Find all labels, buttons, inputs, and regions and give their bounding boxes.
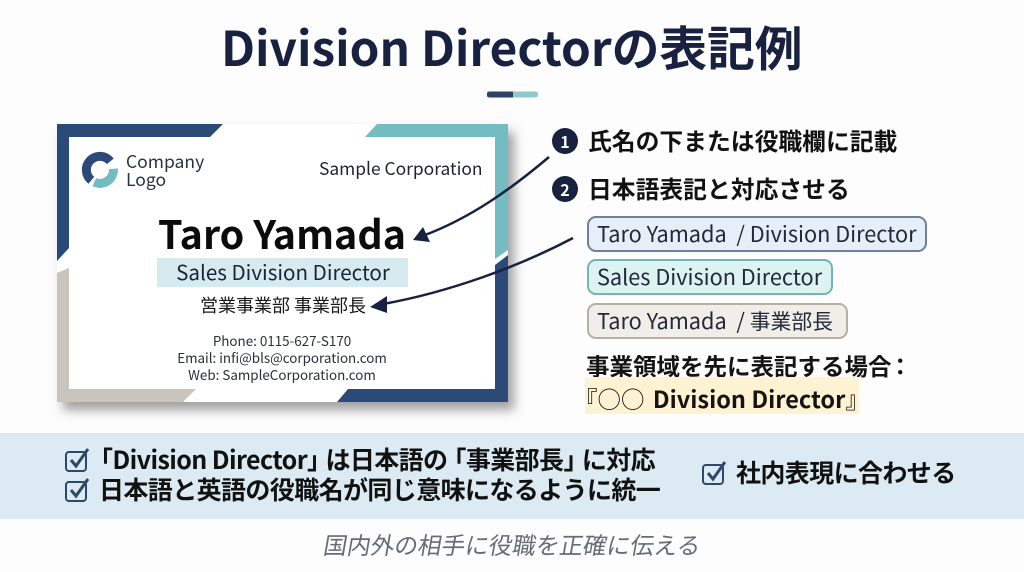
icon: checkbox [65,478,90,502]
badge 2 [552,176,578,202]
step 1 text: 氏名の下または役職欄に記載 [588,122,897,157]
card corner frame [57,124,508,402]
step 1 [552,122,897,157]
person name: Taro Yamada [158,204,406,261]
step 2 text: 日本語表記と対応させる [588,170,850,205]
note heading: 事業領域を先に表記する場合： [586,348,912,382]
item 2 text: 日本語と英語の役職名が同じ意味になるように統一 [99,471,660,507]
job title: Sales Division Director [176,256,390,286]
badge 1: 1 [560,129,570,153]
pill: name and japanese title [587,303,848,339]
check item 3 [702,454,956,490]
footer tagline: 国内外の相手に役職を正確に伝える [321,527,704,561]
item 1 text: 「Division Director」は日本語の「事業部長」に対応 [88,441,655,477]
note highlight [585,377,859,414]
pill: sales division director [587,259,833,295]
title: Division Directorの表記例 [221,11,802,80]
logo text: Company [126,149,204,174]
step 2 [552,170,850,205]
contact details [177,330,387,384]
logo text [126,149,204,192]
pill: name and division director [587,216,927,252]
title accent bar [487,92,538,98]
check item 1 [65,441,656,477]
contact details: Web: SampleCorporation.com [188,364,376,384]
icon: checkbox [65,448,90,472]
pill text 1: Taro Yamada / Division Director [597,218,917,249]
panel: summary band [0,433,1024,519]
badge 2: 2 [560,177,570,201]
logo text: Logo [126,166,166,192]
job title highlight [157,258,408,287]
company name: Sample Corporation [319,156,483,181]
note example: 『○○ Division Director』 [574,381,869,415]
pill text 3: Taro Yamada / 事業部長 [597,305,833,336]
japanese title: 営業事業部 事業部長 [200,292,366,318]
pill text 2: Sales Division Director [597,261,822,292]
panel: business card [57,124,508,402]
item 3 text: 社内表現に合わせる [736,454,956,490]
badge 1 [552,128,578,154]
check item 2 [65,471,660,507]
icon: company logo [82,152,118,188]
contact details: Phone: 0115-627-S170 [213,330,351,350]
icon: checkbox [702,461,726,485]
contact details: Email: infi@bls@corporation.com [177,347,387,367]
